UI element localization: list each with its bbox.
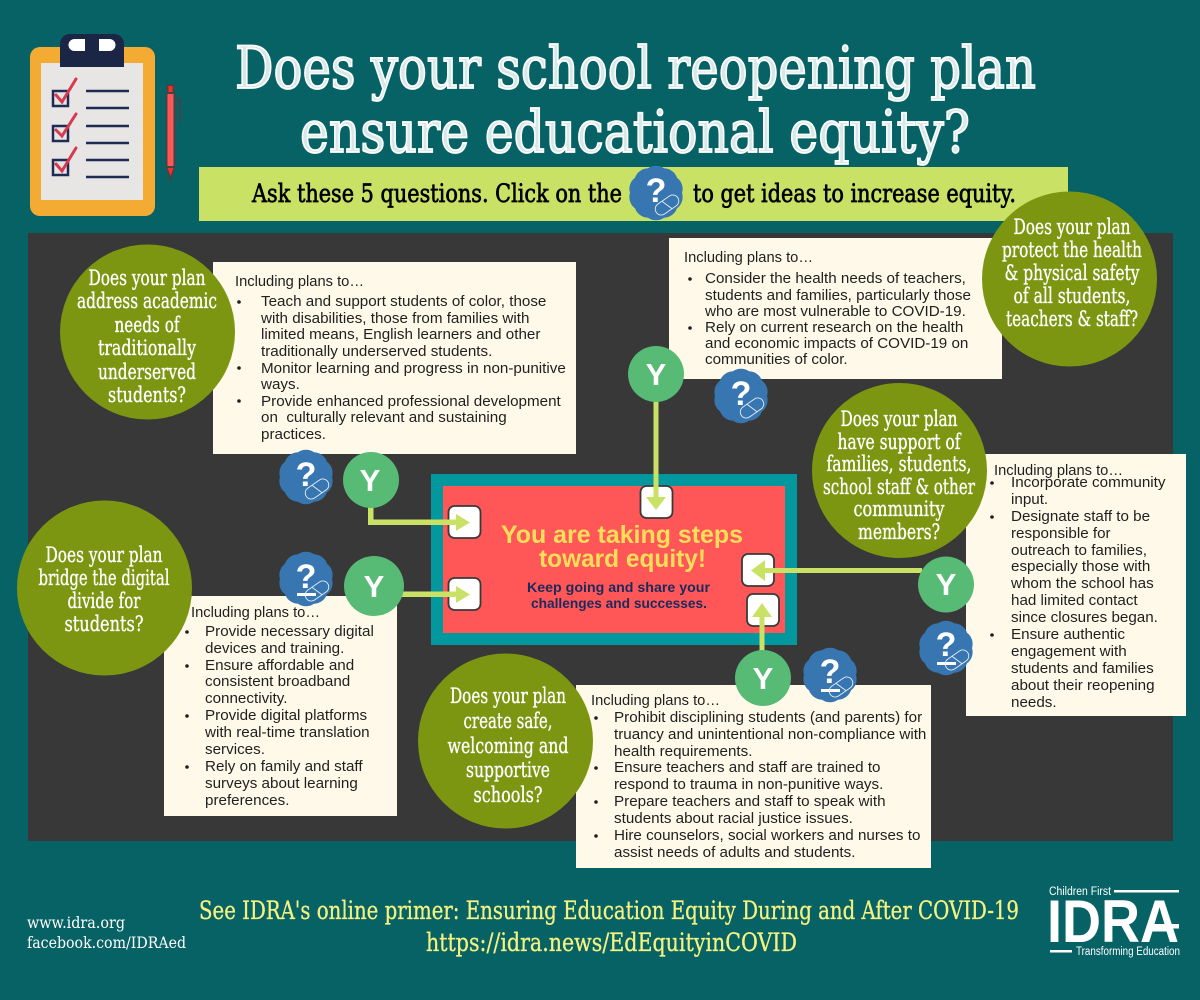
bullet list: health and safety: Consider the health needs of teachers, [705,270,966,287]
bullet list: safe schools [594,709,926,861]
bullet list: safe schools: Prohibit disciplining students (and parents) for [614,709,922,726]
bullet list: community support: responsible for [1011,525,1111,542]
question circle: academic needs: traditionally [98,336,196,360]
bullet list: academic needs: Provide enhanced professional development [261,393,562,410]
bullet list: health and safety: who are most vulnerable to COVID-19. [704,303,966,320]
icon: question badge health and safety [714,369,768,423]
bullet list: digital divide [185,623,374,809]
bullet list: academic needs: on culturally relevant and sustaining [261,409,507,426]
bullet list: academic needs: traditionally underserved students. [261,343,492,360]
bullet list: safe schools: students about racial justice issues. [614,810,853,827]
panel: academic needs plans: Including plans to… [235,274,364,290]
title: Does your school reopening plan [235,34,1036,102]
icon: question badge community support: ? [936,626,956,664]
question circle: academic needs: address academic [77,289,217,313]
website and social links: facebook.com/IDRAed [27,933,186,952]
panel: health and safety plans: Including plans to… [684,250,813,266]
bullet list: community support: Incorporate community [1011,474,1166,491]
callout subtext: Keep going and share your [527,580,711,595]
bullet list: digital divide: Rely on family and staff [205,758,363,775]
callout subtext [527,580,711,611]
title: ensure educational equity? [300,98,970,166]
bullet list: academic needs: with disabilities, those from families with [260,310,529,327]
bullet list: community support [990,474,1166,711]
bullet list: digital divide: surveys about learning [205,775,358,792]
question circle: health and safety: protect the health [1002,238,1142,262]
icon: question badge academic needs [279,450,333,504]
question circle: safe schools: schools? [474,783,542,807]
arrow: digital divide to centre [400,586,470,603]
bullet list: safe schools: Ensure teachers and staff are trained to [614,759,881,776]
question circle: academic needs: underserved [98,360,196,384]
button: Y digital divide: Y [364,569,385,604]
bullet list: community support: outreach to families, [1011,542,1147,559]
central callout [431,474,797,645]
IDRA logo: IDRA [1047,888,1179,955]
question circle: community support: members? [858,520,940,544]
bullet list: digital divide: devices and training. [205,640,344,657]
question circle: community support: families, students, [826,452,972,476]
panel: community support plans: Including plans to… [994,463,1123,479]
question circle: health and safety: of all students, [1014,284,1130,308]
footer primer link: https://idra.news/EdEquityinCOVID [426,928,797,957]
IDRA logo: Children First [1049,886,1112,898]
question circle: health and safety: & physical safety [1004,261,1140,285]
bullet list: community support: students and families [1011,660,1154,677]
question circle: digital divide: bridge the digital [38,566,170,590]
footer primer link [199,896,1019,957]
question circle: community support: Does your plan [840,407,958,431]
question circle: safe schools: welcoming and [448,734,568,758]
question circle: digital divide: Does your plan [46,543,162,567]
button: Y academic needs: Y [360,463,381,498]
question circle: safe schools: supportive [466,758,550,782]
bullet list: digital divide: consistent broadband [205,673,350,690]
icon: question mark badge in banner [629,166,683,220]
question circle: community support: school staff & other [823,475,976,499]
icon: question badge safe schools [803,648,857,702]
bullet list: community support: especially those with [1011,558,1150,575]
button: Y academic needs [343,452,399,508]
icon: question badge digital divide: ? [296,558,316,596]
bullet list: community support: input. [1011,491,1048,508]
icon: question mark badge in banner: ? [646,172,666,210]
bullet list: community support: Designate staff to be [1011,508,1150,525]
main dark panel [28,233,1173,841]
bullet list: community support: had limited contact [1011,592,1138,609]
bullet list: academic needs: ways. [260,376,300,393]
bullet list: safe schools: truancy and unintentional non-compliance with [614,726,926,743]
icon: question badge community support [919,621,973,675]
icon: red pen [166,85,180,183]
icon: question badge digital divide [279,552,333,606]
website and social links: www.idra.org [27,913,125,932]
bullet list: community support: needs. [1011,694,1057,711]
bullet list: health and safety: students and families, particularly those [705,287,971,304]
bullet list: safe schools: respond to trauma in non-punitive ways. [614,776,883,793]
bullet list: digital divide: Provide digital platforms [205,707,367,724]
callout heading: You are taking steps [501,521,743,549]
bullet list: digital divide: Provide necessary digital [205,623,374,640]
bullet list: community support: Ensure authentic [1011,626,1125,643]
question circle: academic needs: Does your plan [88,266,206,290]
panel: academic needs plans [213,262,576,454]
question circle: academic needs: students? [108,383,186,407]
question circle: safe schools: create safe, [464,709,552,733]
bullet list: digital divide: connectivity. [205,690,287,707]
question circle: community support: have support of [838,430,962,454]
question circle: health and safety: teachers & staff? [1006,307,1138,331]
bullet list: health and safety: and economic impacts of COVID-19 on [705,335,968,352]
arrow: community support to centre [751,560,922,581]
subtitle banner [199,167,1068,221]
subtitle banner: Ask these 5 questions. Click on the [251,179,622,208]
bullet list: academic needs: practices. [261,426,326,443]
question circle: safe schools: Does your plan [450,684,566,708]
bullet list: academic needs: Monitor learning and progress in non-punitive [261,360,566,377]
bullet list: digital divide: services. [205,741,265,758]
question circle: community support [812,383,987,558]
bullet list: community support: about their reopening [1011,677,1155,694]
bullet list: community support: engagement with [1011,643,1127,660]
question circle: digital divide: students? [64,612,144,636]
bullet list: community support: since closures began. [1011,609,1158,626]
button: Y health and safety: Y [646,357,667,392]
panel: digital divide plans [164,596,397,816]
website and social links [27,913,186,952]
bullet list: digital divide: preferences. [205,792,289,809]
question circle: health and safety: Does your plan [1014,215,1130,239]
icon: clipboard with checklist [30,34,155,216]
question circle: academic needs [60,244,235,420]
bullet list: health and safety [688,270,971,368]
button: Y safe schools [735,650,791,706]
button: Y safe schools: Y [753,661,774,696]
bullet list: digital divide: with real-time translation [204,724,370,741]
bullet list: digital divide: Ensure affordable and [205,657,354,674]
bullet list: safe schools: Hire counselors, social workers and nurses to [614,827,920,844]
question circle: community support: community [854,497,945,521]
question circle: health and safety [982,192,1157,366]
callout heading [501,521,743,573]
arrow: health and safety to centre [646,400,666,510]
arrow: safe schools to centre [752,603,772,655]
button: Y health and safety [628,346,684,402]
bullet list: safe schools: Prepare teachers and staff to speak with [614,793,886,810]
bullet list: academic needs: limited means, English learners and other [261,326,540,343]
bullet list: academic needs [237,293,566,443]
title [235,34,1036,166]
question circle: digital divide [17,500,192,676]
callout heading: toward equity! [539,545,706,573]
subtitle banner: to get ideas to increase equity. [693,179,1016,208]
button: Y community support: Y [936,567,957,602]
bullet list: health and safety: Rely on current research on the health [705,319,963,336]
icon: question badge health and safety: ? [731,375,751,413]
arrow: academic needs to centre [368,505,470,531]
panel: safe schools plans: Including plans to… [591,693,720,709]
button: Y digital divide [344,556,404,616]
button: Y community support [918,556,974,612]
question circle: academic needs: needs of [114,313,181,337]
icon: question badge academic needs: ? [296,456,316,494]
question circle: digital divide: divide for [68,589,141,613]
panel: digital divide plans: Including plans to… [191,605,320,621]
bullet list: community support: whom the school has [1010,575,1154,592]
bullet list: safe schools: assist needs of adults and students. [614,844,855,861]
bullet list: academic needs: Teach and support students of color, those [261,293,546,310]
panel: community support plans [966,454,1186,716]
icon: question badge safe schools: ? [820,653,840,691]
callout subtext: challenges and successes. [531,596,707,611]
IDRA logo: Transforming Education [1076,946,1180,958]
panel: safe schools plans [576,685,931,868]
bullet list: health and safety: communities of color. [705,351,848,368]
panel: health and safety plans [669,238,1002,379]
question circle: safe schools [418,654,593,828]
bullet list: safe schools: health requirements. [614,743,752,760]
arrow targets [448,486,779,626]
